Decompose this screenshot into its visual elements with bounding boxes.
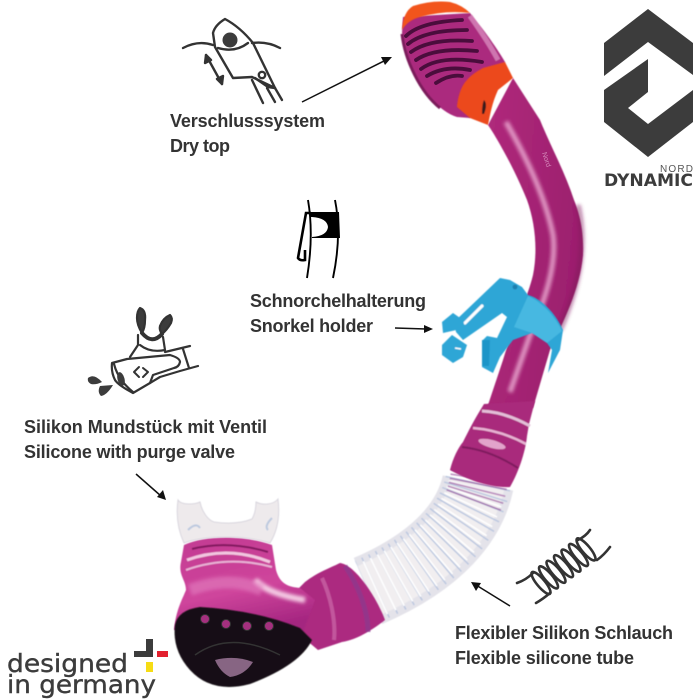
snorkel product illustration bbox=[174, 2, 583, 687]
icon: silicone mouthpiece diagram bbox=[88, 308, 198, 396]
icon: dry top valve diagram bbox=[183, 19, 282, 103]
lower purple connector bbox=[280, 563, 385, 650]
arrow: snorkel holder bbox=[395, 325, 433, 333]
arrow: dry top bbox=[302, 57, 392, 102]
logo: Nord Dynamic: NORD bbox=[660, 164, 693, 175]
orange top cap bbox=[402, 2, 470, 30]
flexible silicone bellows bbox=[368, 472, 480, 591]
arrow: flexible tube bbox=[471, 582, 510, 606]
label: flexible tube bbox=[455, 623, 673, 668]
label: closure system: Verschlusssystem bbox=[170, 111, 325, 131]
label: snorkel holder: Snorkel holder bbox=[250, 316, 373, 336]
label: flexible tube: Flexibler Silikon Schlauch bbox=[455, 623, 673, 643]
head purple splash guard bbox=[402, 13, 505, 118]
label: closure system bbox=[170, 111, 325, 156]
label: silicone mouthpiece: Silikon Mundstück mit Ventil bbox=[24, 417, 267, 437]
label: snorkel holder: Schnorchelhalterung bbox=[250, 291, 426, 311]
logo: designed in germany bbox=[7, 639, 168, 699]
logo: Nord Dynamic bbox=[604, 9, 693, 191]
black purge valve cover bbox=[175, 607, 312, 687]
icon: snorkel holder diagram bbox=[298, 200, 340, 278]
orange collar bbox=[457, 62, 513, 125]
head air slots bbox=[406, 20, 482, 83]
tube logo mark: Nord bbox=[540, 151, 551, 168]
logo: designed in germany: designed bbox=[7, 649, 128, 678]
main purple tube bbox=[487, 78, 583, 408]
purple tube collar bbox=[450, 401, 535, 487]
snorkel holder clip bbox=[442, 278, 563, 373]
label: silicone mouthpiece: Silicone with purge valve bbox=[24, 442, 235, 462]
logo: Nord Dynamic: DYNAMIC bbox=[604, 171, 693, 191]
label: silicone mouthpiece bbox=[24, 417, 267, 462]
label: snorkel holder bbox=[250, 291, 426, 336]
silicone mouthpiece bbox=[177, 499, 279, 543]
mouth body bbox=[174, 538, 315, 640]
icon: coil tube diagram bbox=[517, 530, 610, 603]
label: closure system: Dry top bbox=[170, 136, 230, 156]
logo: designed in germany: in germany bbox=[7, 670, 156, 699]
label: flexible tube: Flexible silicone tube bbox=[455, 648, 634, 668]
arrow: mouthpiece bbox=[136, 474, 166, 500]
